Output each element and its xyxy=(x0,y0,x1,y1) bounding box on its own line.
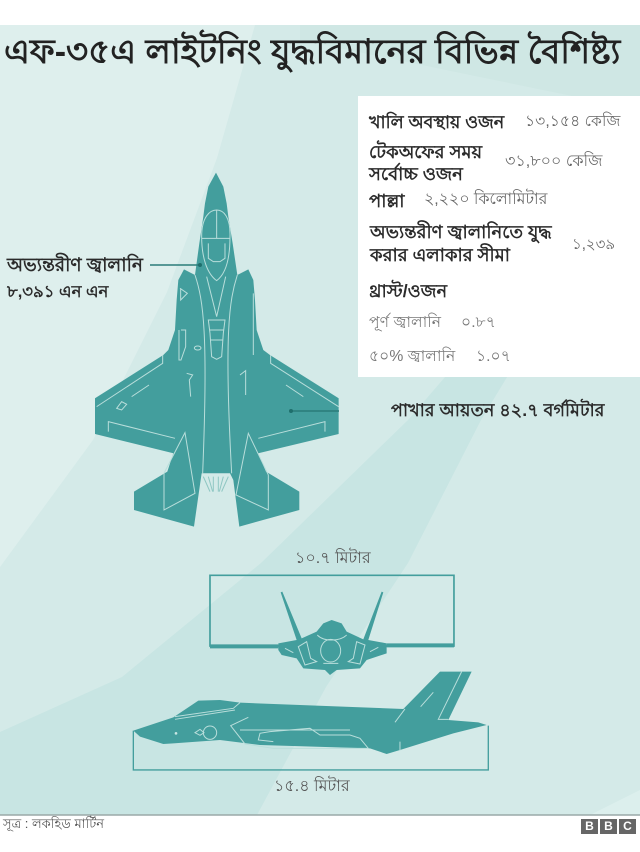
jet front view xyxy=(210,575,454,675)
takeoff weight label xyxy=(368,140,483,184)
takeoff weight label: টেকঅফের সময় xyxy=(369,142,482,162)
full fuel label: পূর্ণ জ্বালানি xyxy=(369,314,441,331)
width label: ১০.৭ মিটার xyxy=(295,550,371,567)
title: এফ-৩৫এ লাইটনিং যুদ্ধবিমানের বিভিন্ন বৈশিষ্ট্য xyxy=(4,33,620,71)
combat radius label xyxy=(369,220,552,265)
half fuel value: ১.০৭ xyxy=(476,348,511,365)
empty weight label: খালি অবস্থায় ওজন xyxy=(369,112,504,132)
wing area callout: পাখার আয়তন ৪২.৭ বর্গমিটার xyxy=(391,400,604,420)
range value: ২,২২০ কিলোমিটার xyxy=(424,191,547,208)
wing leader line xyxy=(289,409,339,413)
fuel callout: অভ্যন্তরীণ জ্বালানি xyxy=(7,254,143,275)
combat radius value: ১,২৩৯ xyxy=(572,236,615,253)
half fuel label: ৫০% জ্বালানি xyxy=(369,348,455,365)
combat radius label: করার এলাকার সীমা xyxy=(370,245,510,265)
source: সূত্র : লকহিড মার্টিন xyxy=(3,816,104,831)
empty weight value: ১৩,১৫৪ কেজি xyxy=(525,113,620,130)
combat radius label: অভ্যন্তরীণ জ্বালানিতে যুদ্ধ xyxy=(370,222,552,242)
BBC logo: C xyxy=(623,819,632,833)
fuel capacity value: ৮,৩৯১ এন এন xyxy=(7,283,108,301)
thrust weight heading: থ্রাস্ট/ওজন xyxy=(369,281,447,301)
BBC logo: B xyxy=(604,819,613,833)
BBC logo xyxy=(581,819,636,834)
fuel leader line xyxy=(150,263,202,267)
half fuel row xyxy=(369,346,511,365)
range label: পাল্লা xyxy=(369,191,404,211)
full fuel row xyxy=(369,312,496,332)
takeoff weight label: সর্বোচ্চ ওজন xyxy=(369,164,463,184)
full fuel value: ০.৮৭ xyxy=(461,314,496,331)
jet side view xyxy=(133,672,488,770)
BBC logo: B xyxy=(585,819,594,833)
panel: specifications xyxy=(358,96,640,377)
takeoff weight value: ৩১,৮০০ কেজি xyxy=(505,153,602,170)
length label: ১৫.৪ মিটার xyxy=(274,778,350,795)
